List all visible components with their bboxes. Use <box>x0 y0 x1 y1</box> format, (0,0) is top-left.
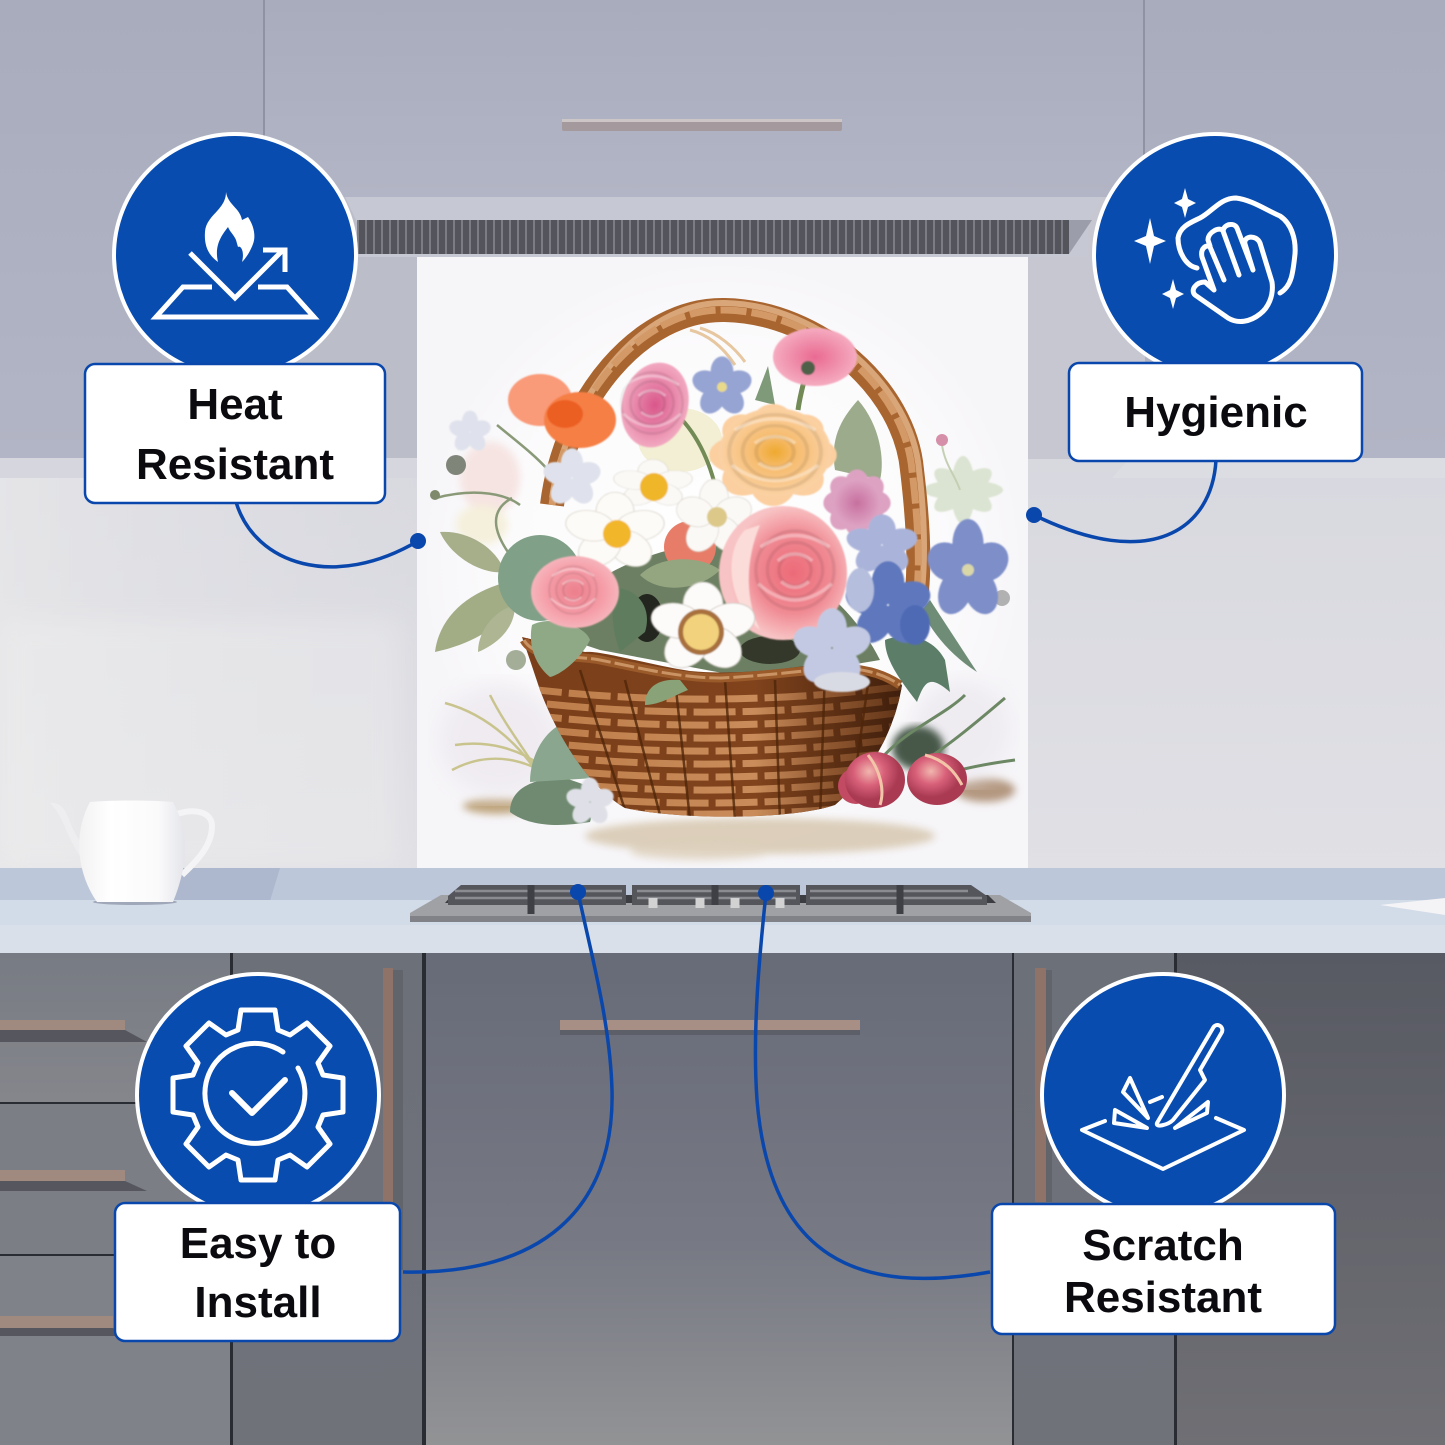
periwinkle flower <box>689 356 755 418</box>
badge: easy to install <box>137 974 379 1216</box>
drawer handles <box>0 968 1052 1336</box>
lower cabinets <box>0 953 1445 1445</box>
label: easy to install <box>115 1203 400 1341</box>
small white-blue flowers <box>447 411 604 508</box>
connector: easy to install <box>403 884 612 1272</box>
icon: flame over surface <box>156 192 314 317</box>
small pink rose <box>531 556 619 628</box>
faded pale flower right <box>923 456 1003 524</box>
upper cabinets <box>0 0 1445 478</box>
grass <box>445 695 545 785</box>
basket handle <box>552 303 924 590</box>
leaves over basket rim <box>531 559 720 705</box>
ground wash <box>463 778 1015 860</box>
white anemone <box>646 582 760 675</box>
connector: scratch resistant <box>755 885 990 1278</box>
label: scratch resistant: Scratch <box>1082 1221 1244 1270</box>
icon: gear with check <box>173 1010 343 1180</box>
small pink bud <box>936 434 960 490</box>
connector: hygienic <box>1026 460 1216 542</box>
countertop <box>0 868 1445 953</box>
peach rose <box>709 404 837 506</box>
connector: heat resistant <box>236 502 426 567</box>
label: scratch resistant: Resistant <box>1064 1273 1262 1322</box>
cream backdrop and foliage inside bouquet <box>498 366 950 702</box>
icon: knife scratching surface <box>1082 1025 1244 1169</box>
stems and buds <box>436 425 548 555</box>
badge: heat resistant <box>114 134 356 376</box>
pale left flowers <box>456 442 520 545</box>
panel: floral basket splashback <box>417 257 1028 868</box>
label: heat resistant: Resistant <box>136 440 334 489</box>
white flower: right <box>673 479 755 558</box>
blue flowers <box>841 514 1013 650</box>
teapot <box>50 800 212 905</box>
big pink rose <box>719 506 847 640</box>
icon: hand wiping with sparkles <box>1134 188 1295 321</box>
bottom left white flower <box>564 778 616 827</box>
pink carnation <box>612 355 698 455</box>
label: scratch resistant <box>992 1204 1335 1334</box>
badge: scratch resistant <box>1042 974 1284 1216</box>
badge: hygienic <box>1094 134 1336 376</box>
label: hygienic: Hygienic <box>1124 388 1308 437</box>
label: easy to install: Easy to <box>180 1219 336 1268</box>
label: heat resistant <box>85 364 385 503</box>
fruits <box>838 752 967 808</box>
orange poppy <box>508 374 616 448</box>
wall <box>0 0 1445 880</box>
cooker hood <box>345 197 1102 257</box>
cabinet handle <box>562 119 842 131</box>
top pink flower <box>773 328 857 386</box>
label: easy to install: Install <box>194 1278 322 1327</box>
gas hob <box>410 885 1031 922</box>
label: hygienic <box>1069 363 1362 461</box>
white flower: left <box>561 492 669 573</box>
white flower: top <box>609 460 697 509</box>
label: heat resistant: Heat <box>187 380 283 429</box>
background leaves and greenery <box>435 400 1015 825</box>
pale blue flower <box>790 608 874 692</box>
basket body <box>520 637 920 820</box>
flowers <box>447 328 1013 827</box>
mauve peony <box>823 469 891 537</box>
